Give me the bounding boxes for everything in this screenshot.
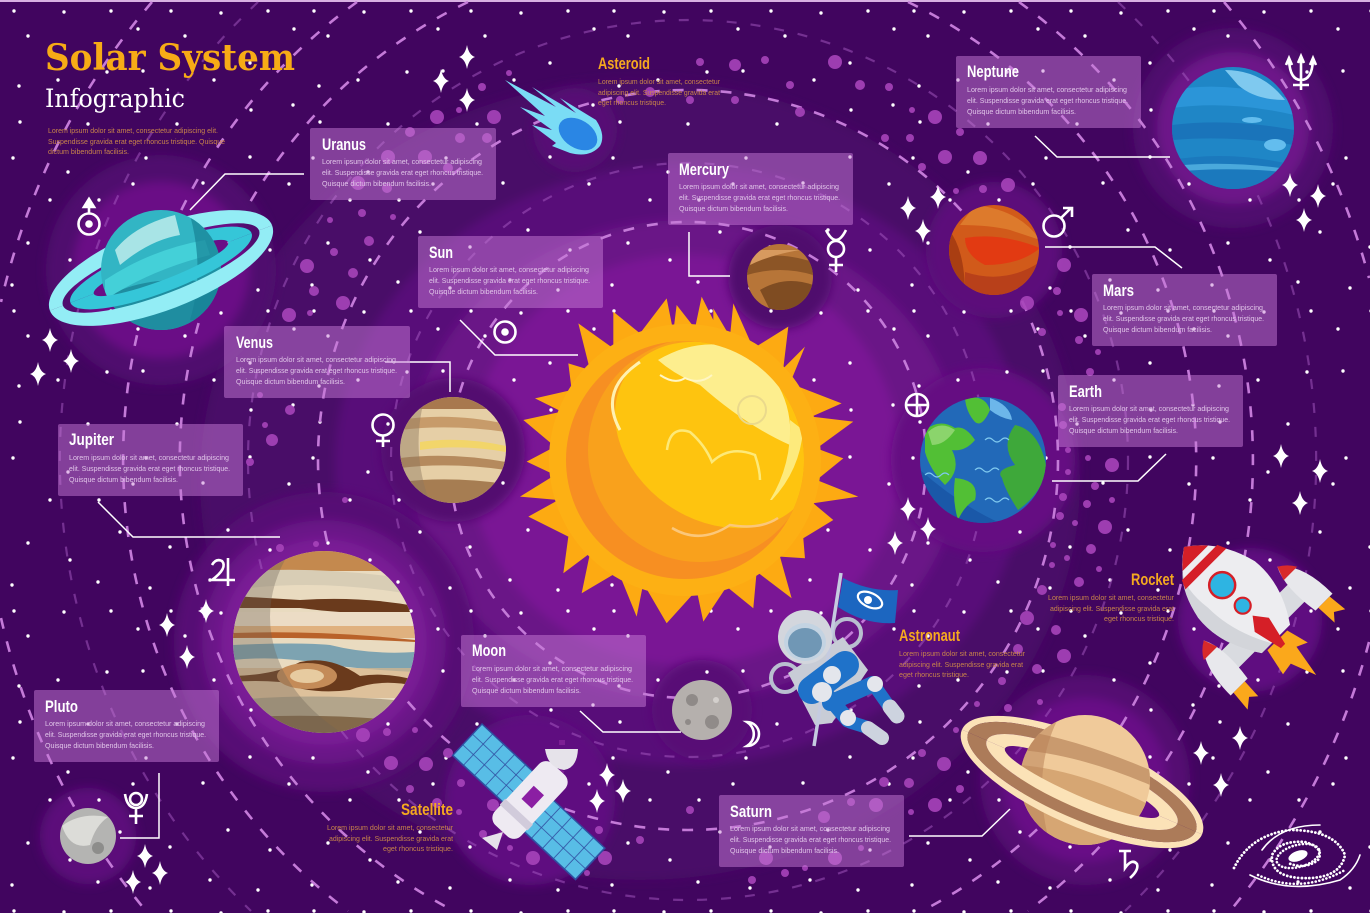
panel: Earth: elit. Suspendisse gravida erat eget rhoncus tristique. (1069, 415, 1230, 424)
label: Satellite: adipiscing elit. Suspendisse gravida erat (329, 834, 454, 843)
panel: Neptune: elit. Suspendisse gravida erat eget rhoncus tristique. (967, 96, 1128, 105)
panel: Venus: Quisque dictum bibendum facilisis. (236, 377, 345, 386)
label: Asteroid: Lorem ipsum dolor sit amet, consectetur (598, 77, 720, 86)
symbol: Sun (494, 322, 516, 342)
panel: Jupiter: Jupiter (69, 430, 114, 449)
panel: Sun: Sun (429, 243, 453, 262)
heading (45, 37, 295, 156)
label: Astronaut: eget rhoncus tristique. (899, 670, 969, 679)
icon: rocket (1133, 496, 1365, 728)
intro text: dictum bibendum facilisis. (48, 147, 129, 156)
panel: Mercury: Mercury (679, 160, 729, 179)
symbol: Mars (1044, 208, 1072, 236)
panel: Jupiter: Quisque dictum bibendum facilisis. (69, 475, 178, 484)
label: Rocket (1048, 570, 1175, 623)
panel: Pluto: Pluto (45, 697, 78, 716)
symbol: Saturn (1119, 851, 1137, 878)
backpack rings (771, 664, 799, 692)
icon: galaxy (1234, 825, 1360, 886)
flames (1263, 626, 1328, 691)
side boosters (1273, 553, 1332, 612)
sun core (549, 324, 821, 596)
label: Satellite: Lorem ipsum dolor sit amet, consectetur (327, 823, 453, 832)
panel: Saturn: Lorem ipsum dolor sit amet, consectetur adipiscing (730, 824, 890, 833)
panel: Pluto: elit. Suspendisse gravida erat eget rhoncus tristique. (45, 730, 206, 739)
panel: Jupiter: elit. Suspendisse gravida erat eget rhoncus tristique. (69, 464, 230, 473)
connectors (1216, 579, 1311, 674)
ring front (944, 730, 1202, 875)
planet: Neptune (1172, 67, 1294, 190)
panel: Moon: Moon (472, 641, 506, 660)
planet: Jupiter (233, 551, 415, 735)
panel: Earth: Lorem ipsum dolor sit amet, consectetur adipiscing (1069, 404, 1229, 413)
panel: Moon: elit. Suspendisse gravida erat eget rhoncus tristique. (472, 675, 633, 684)
intro text (48, 126, 225, 156)
panel: Mars: Lorem ipsum dolor sit amet, consectetur adipiscing (1103, 303, 1263, 312)
planet: Moon (672, 680, 732, 740)
panel: Uranus: Lorem ipsum dolor sit amet, consectetur adipiscing (322, 157, 482, 166)
panel: Venus (224, 326, 410, 398)
symbol: Neptune (1286, 56, 1316, 90)
leader lines (98, 136, 1182, 838)
windows (1204, 567, 1241, 604)
panel: Neptune: Neptune (967, 62, 1019, 81)
panel: Mercury: Quisque dictum bibendum facilisis. (679, 204, 788, 213)
panel: Neptune: Lorem ipsum dolor sit amet, consectetur adipiscing (967, 85, 1127, 94)
suit (812, 665, 897, 738)
sun flames (520, 297, 858, 623)
lower dish (482, 832, 503, 850)
symbol: Venus (372, 414, 394, 447)
knees and gloves (812, 666, 883, 726)
title: Solar System (45, 37, 295, 79)
label: Asteroid: eget rhoncus tristique. (598, 98, 666, 107)
panel: Uranus: Quisque dictum bibendum facilisis. (322, 179, 431, 188)
label: Astronaut (899, 626, 1025, 679)
icon: astronaut (771, 573, 898, 746)
planet: Uranus (48, 210, 274, 330)
bubbles: asteroid belts (246, 55, 1119, 884)
panel: Sun: Quisque dictum bibendum facilisis. (429, 287, 538, 296)
panel: Earth: Quisque dictum bibendum facilisis. (1069, 426, 1178, 435)
panel: Moon: Quisque dictum bibendum facilisis. (472, 686, 581, 695)
intro text: Suspendisse gravida erat eget rhoncus tristique. Quisque (48, 137, 225, 146)
label: Asteroid: Asteroid (598, 54, 650, 73)
label: Asteroid: adipiscing elit. Suspendisse gravida erat (598, 88, 721, 97)
backpack (788, 637, 868, 725)
label: Asteroid (598, 54, 721, 107)
background glow: sun (200, 80, 1080, 880)
planet: Saturn (960, 715, 1204, 848)
planet: Venus (400, 397, 506, 503)
solar panel lower (521, 797, 605, 880)
panel: Saturn: Saturn (730, 802, 772, 821)
icon: asteroid (505, 80, 603, 157)
planet: Earth (920, 397, 1047, 523)
panel: Mars: Quisque dictum bibendum facilisis. (1103, 325, 1212, 334)
panel: Mercury: Lorem ipsum dolor sit amet, consectetur adipiscing (679, 182, 839, 191)
panel: Sun: Lorem ipsum dolor sit amet, consectetur adipiscing (429, 265, 589, 274)
label: Rocket: adipiscing elit. Suspendisse gravida erat (1050, 604, 1175, 613)
panel: Neptune (956, 56, 1141, 128)
panel: Mercury (668, 153, 853, 225)
panel: Sun (418, 236, 603, 308)
panel: Earth: Earth (1069, 382, 1102, 401)
planet: Pluto (60, 808, 116, 864)
panel: Jupiter: Lorem ipsum dolor sit amet, consectetur adipiscing (69, 453, 229, 462)
panel: Pluto (34, 690, 219, 762)
tail fin (1246, 609, 1290, 653)
panel: Moon: Lorem ipsum dolor sit amet, consectetur adipiscing (472, 664, 632, 673)
panel: Earth (1058, 375, 1243, 447)
body (487, 756, 573, 844)
icon: satellite (453, 724, 605, 880)
ring front (50, 225, 287, 350)
label: Astronaut: Astronaut (899, 626, 960, 645)
ring back (35, 186, 272, 311)
label: Satellite: eget rhoncus tristique. (383, 844, 453, 853)
planet: Mercury (747, 244, 813, 310)
intro text: Lorem ipsum dolor sit amet, consectetur adipiscing elit. (48, 126, 218, 135)
label: Astronaut: Lorem ipsum dolor sit amet, consectetur (899, 649, 1025, 658)
panel: Mars: Mars (1103, 281, 1134, 300)
label: Rocket: Lorem ipsum dolor sit amet, consectetur (1048, 593, 1174, 602)
symbol: Jupiter (212, 558, 235, 586)
label: Satellite: Satellite (401, 800, 453, 819)
helmet (778, 610, 832, 664)
symbol: Mercury (826, 230, 846, 272)
panel: Venus: Venus (236, 333, 273, 352)
body (1155, 518, 1305, 668)
antenna dish (545, 749, 578, 770)
solar panel upper (453, 724, 537, 807)
panel: Moon (461, 635, 646, 707)
panel: Saturn: Quisque dictum bibendum facilisis. (730, 846, 839, 855)
label: Rocket: eget rhoncus tristique. (1104, 614, 1174, 623)
panel: Venus: Lorem ipsum dolor sit amet, consectetur adipiscing (236, 355, 396, 364)
panel: Venus: elit. Suspendisse gravida erat eget rhoncus tristique. (236, 366, 397, 375)
connectors (497, 740, 562, 838)
flag (838, 578, 898, 623)
panel: Mars: elit. Suspendisse gravida erat eget rhoncus tristique. (1103, 314, 1264, 323)
panel: Mars (1092, 274, 1277, 346)
panel: Pluto: Quisque dictum bibendum facilisis. (45, 741, 154, 750)
label: Astronaut: adipiscing elit. Suspendisse gravida erat (899, 660, 1024, 669)
top border (0, 0, 1370, 2)
label: Rocket: Rocket (1131, 570, 1174, 589)
ring back (962, 689, 1220, 834)
flag pole (814, 573, 841, 746)
panel: Saturn: elit. Suspendisse gravida erat eget rhoncus tristique. (730, 835, 891, 844)
planet: Mars (949, 205, 1040, 295)
panel: Mercury: elit. Suspendisse gravida erat eget rhoncus tristique. (679, 193, 840, 202)
panel: Uranus: elit. Suspendisse gravida erat eget rhoncus tristique. (322, 168, 483, 177)
panel: Saturn (719, 795, 904, 867)
symbol: Pluto (125, 793, 147, 824)
panel: Sun: elit. Suspendisse gravida erat eget rhoncus tristique. (429, 276, 590, 285)
symbol: Earth (906, 394, 928, 416)
label: Satellite (327, 800, 454, 853)
panel: Jupiter (58, 424, 243, 496)
symbol: Moon (747, 722, 759, 746)
subtitle: Infographic (45, 84, 185, 113)
panel: Pluto: Lorem ipsum dolor sit amet, consectetur adipiscing (45, 719, 205, 728)
symbol: Uranus (78, 199, 100, 234)
panel: Uranus: Uranus (322, 135, 366, 154)
panel: Neptune: Quisque dictum bibendum facilisis. (967, 107, 1076, 116)
sun (520, 297, 858, 623)
panel: Uranus (310, 128, 496, 200)
